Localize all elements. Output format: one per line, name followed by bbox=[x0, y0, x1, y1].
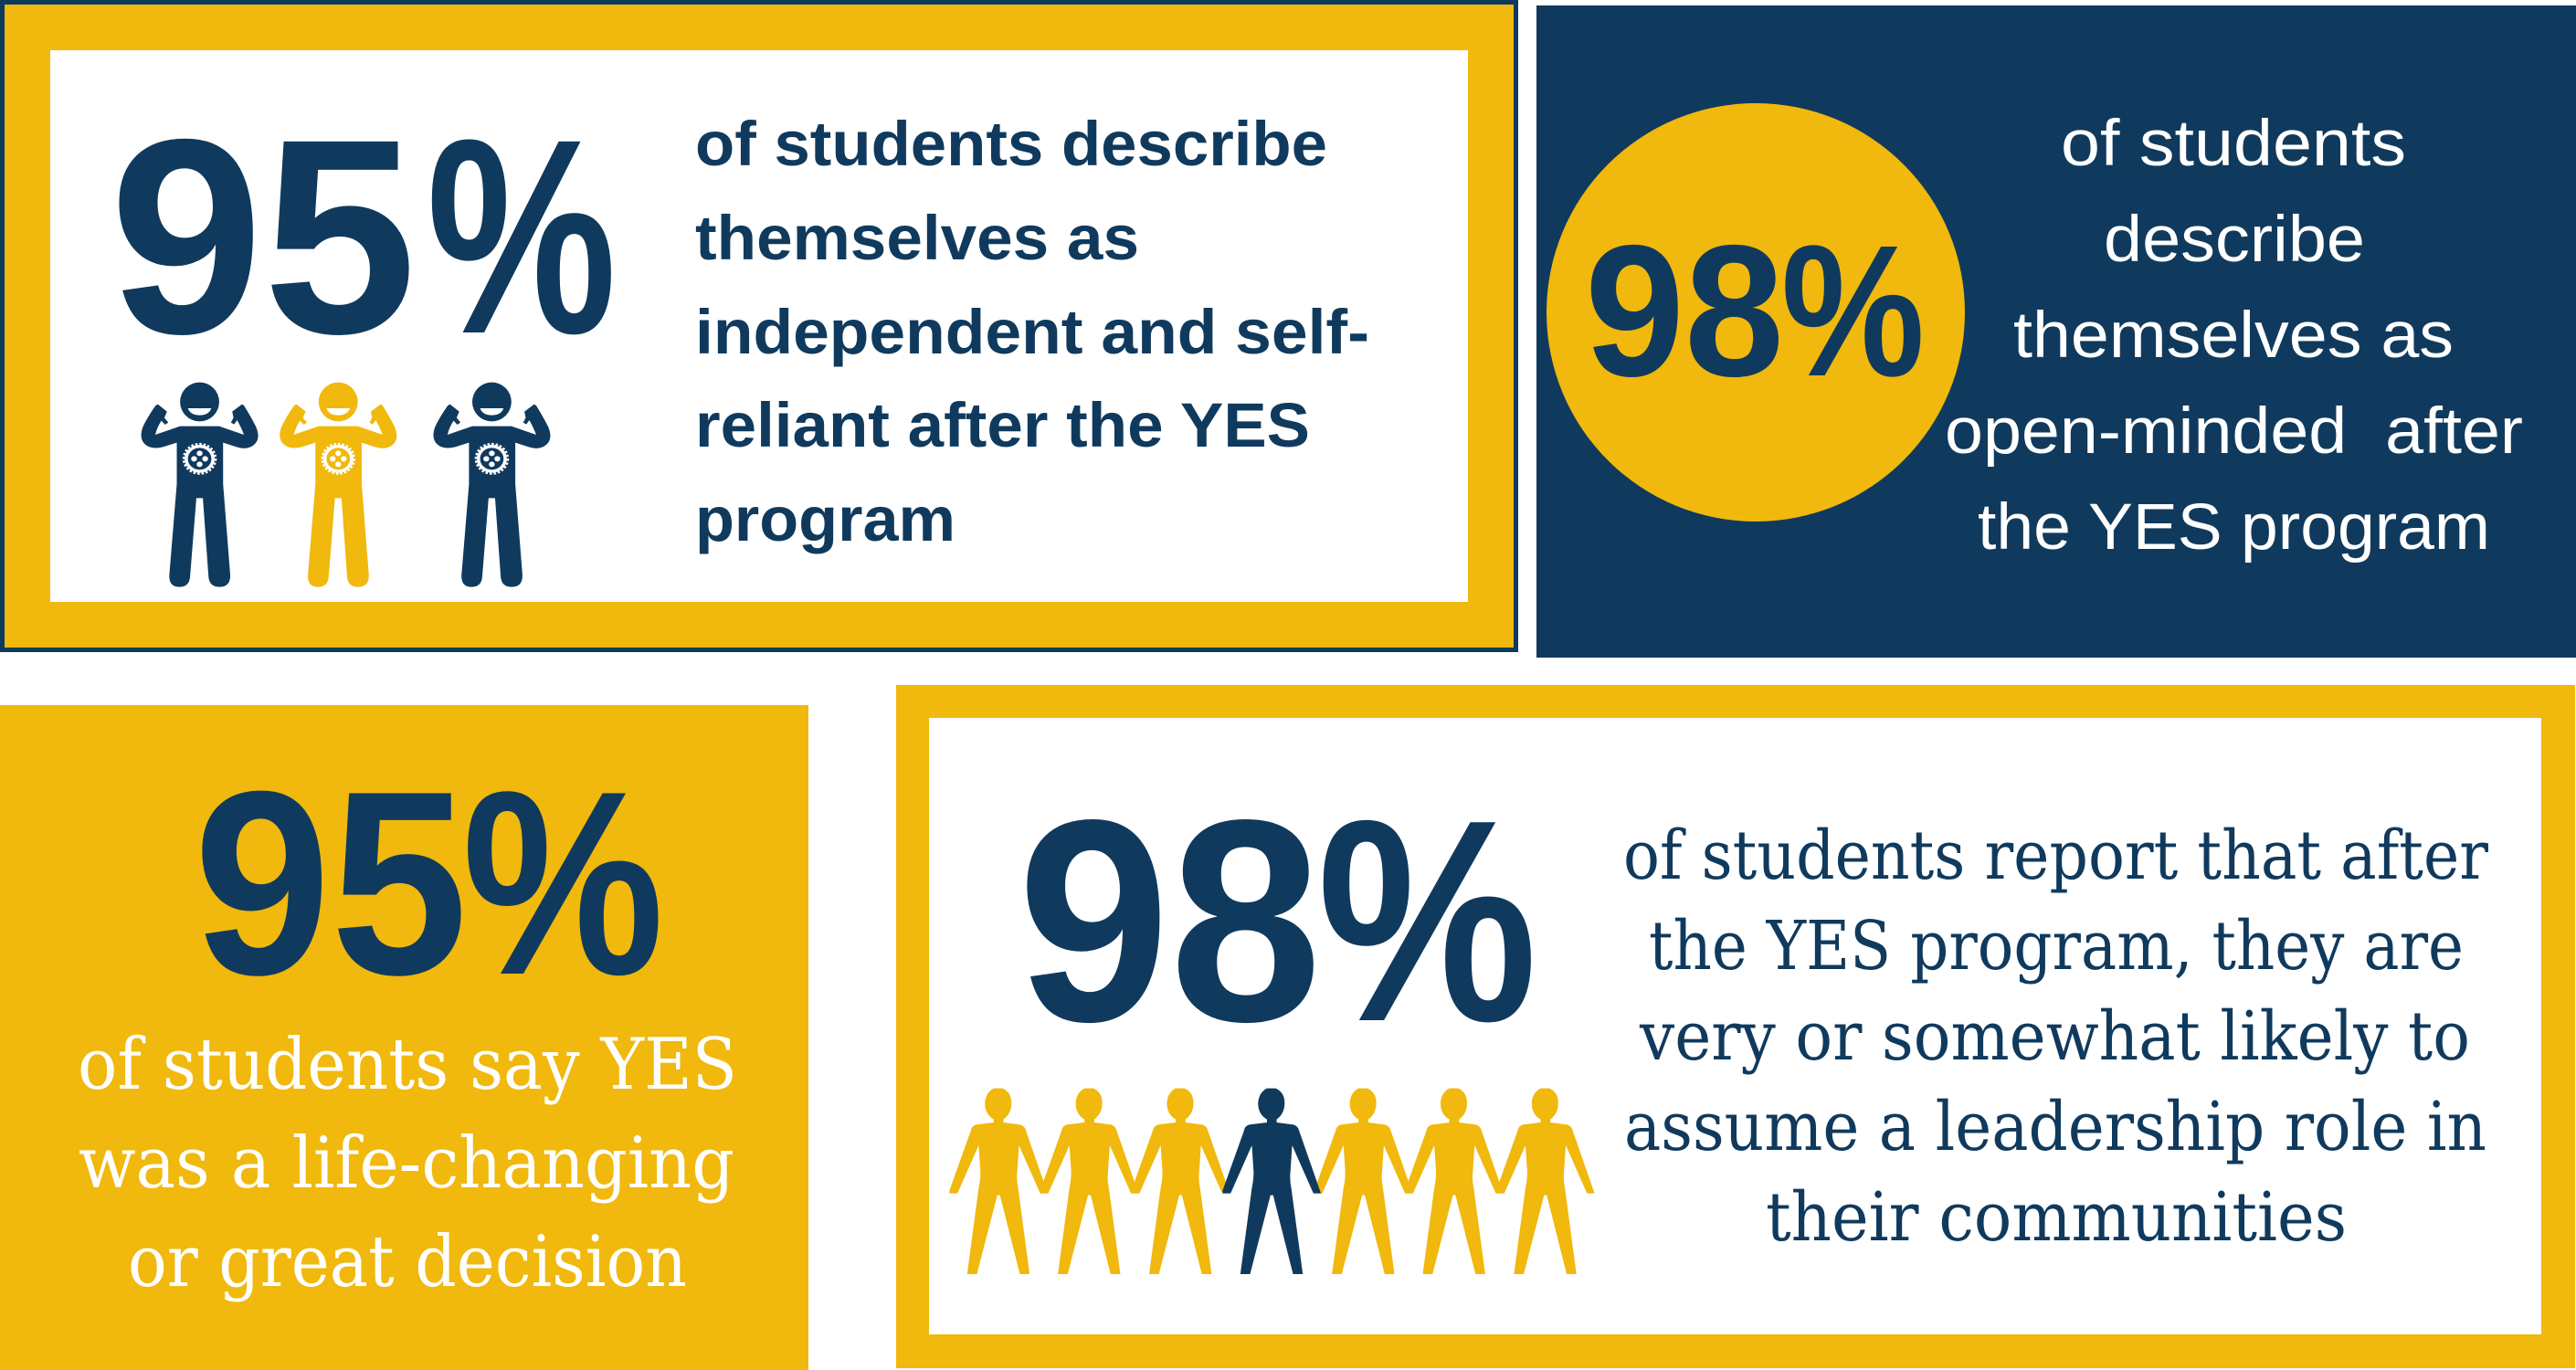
statistic: 98%: 98 bbox=[1018, 760, 1322, 1081]
statistic: 95% bbox=[110, 82, 617, 392]
text: open-minded description: of students bbox=[2061, 108, 2406, 180]
text: open-minded description: themselves as bbox=[2013, 300, 2454, 372]
text: open-minded description: open-minded after bbox=[1945, 395, 2523, 468]
icon: row of people holding hands bbox=[949, 1089, 1595, 1274]
text: independent description: independent and self- bbox=[695, 297, 1369, 367]
panel: independent and self-reliant bbox=[0, 0, 1518, 652]
text: leadership description: the YES program, they are bbox=[1649, 907, 2464, 985]
text: life-changing description: was a life-changing bbox=[79, 1122, 734, 1205]
text: independent description bbox=[695, 109, 1369, 554]
panel: life-changing decision bbox=[0, 705, 808, 1370]
statistic: 95%: 95 bbox=[110, 82, 417, 392]
statistic: 95% bbox=[194, 736, 664, 1029]
statistic: 98% bbox=[1018, 760, 1537, 1081]
text: life-changing description: of students say YES bbox=[78, 1024, 737, 1106]
panel: open-minded bbox=[1536, 5, 2576, 658]
panel: leadership bbox=[896, 685, 2575, 1368]
statistic: 98%: % bbox=[1317, 760, 1537, 1081]
badge: yellow circle with 98% bbox=[1547, 103, 1965, 522]
text: life-changing description: or great decision bbox=[128, 1221, 687, 1303]
statistic: 95%: % bbox=[462, 736, 664, 1029]
text: open-minded description: describe bbox=[2104, 204, 2365, 276]
text: open-minded description: the YES program bbox=[1978, 491, 2490, 564]
text: leadership description: of students report that after bbox=[1623, 817, 2489, 895]
text: leadership description bbox=[1623, 817, 2489, 1257]
text: leadership description: very or somewhat likely to bbox=[1639, 997, 2470, 1076]
text: life-changing description bbox=[78, 1024, 737, 1303]
badge: yellow circle with 98%: 98 bbox=[1585, 206, 1784, 416]
text: leadership description: their communities bbox=[1766, 1178, 2347, 1257]
text: open-minded description bbox=[1945, 108, 2523, 564]
statistic: 95%: 95 bbox=[194, 736, 468, 1029]
text: independent description: of students describe bbox=[695, 109, 1327, 179]
statistic: 95%: % bbox=[427, 82, 617, 392]
text: leadership description: assume a leadership role in bbox=[1624, 1088, 2486, 1166]
text: independent description: reliant after the YES bbox=[695, 390, 1310, 460]
icon: three strong figures bbox=[142, 383, 550, 587]
text: independent description: program bbox=[695, 484, 955, 554]
badge: yellow circle with 98%: % bbox=[1781, 206, 1925, 416]
text: independent description: themselves as bbox=[695, 203, 1139, 273]
